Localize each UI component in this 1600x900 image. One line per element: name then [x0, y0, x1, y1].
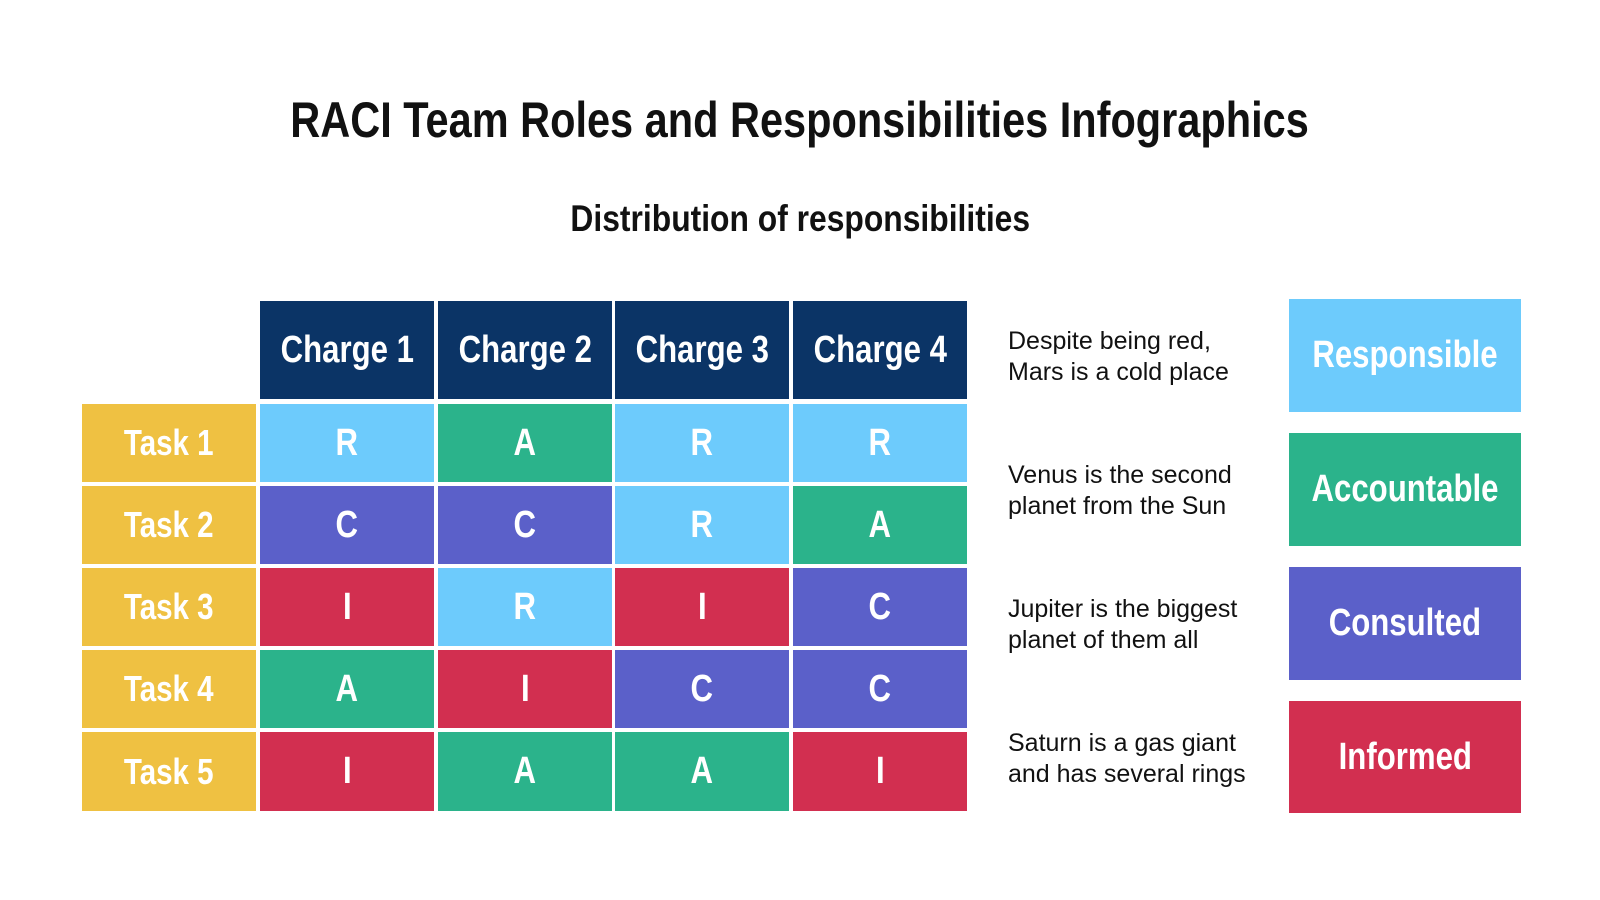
legend box: consulted	[1289, 567, 1521, 680]
legend text: responsible: Despite being red,	[1008, 327, 1211, 355]
task rows: Task 1	[124, 422, 214, 463]
task rows: C	[869, 668, 891, 710]
task rows: R	[691, 504, 713, 546]
legend box: consulted: Consulted	[1329, 602, 1481, 644]
legend text: accountable	[1008, 461, 1232, 520]
task rows: I	[698, 586, 706, 628]
header row: Charge 3	[635, 328, 769, 370]
task rows: Task 3	[124, 586, 214, 627]
table	[82, 301, 967, 811]
legend text: informed	[1008, 729, 1246, 788]
header row: Charge 1	[280, 328, 414, 370]
legend box: informed: Informed	[1338, 736, 1472, 778]
legend box: accountable	[1289, 433, 1521, 546]
task rows: Task 5	[124, 750, 214, 792]
task rows: A	[514, 422, 536, 464]
task rows: C	[869, 586, 891, 628]
header row: Charge 2	[458, 328, 592, 370]
legend text: consulted: planet of them all	[1008, 626, 1198, 654]
legend box: accountable: Accountable	[1311, 468, 1498, 510]
task rows: I	[876, 750, 884, 792]
header row	[260, 301, 967, 399]
legend box: responsible	[1289, 299, 1521, 412]
task rows: R	[869, 422, 891, 464]
legend text: informed: Saturn is a gas giant	[1008, 729, 1236, 757]
subtitle: Distribution of responsibilities	[570, 198, 1030, 239]
task rows: A	[336, 668, 358, 710]
task rows: C	[336, 504, 358, 546]
legend box: responsible: Responsible	[1312, 334, 1498, 376]
task rows: R	[336, 422, 358, 464]
task rows: C	[691, 668, 713, 710]
legend text: accountable: planet from the Sun	[1008, 492, 1226, 520]
task rows: C	[514, 504, 536, 546]
task rows: I	[521, 668, 529, 710]
task rows: Task 4	[124, 668, 214, 709]
task rows: A	[514, 750, 536, 792]
legend box: informed	[1289, 701, 1521, 813]
legend text: accountable: Venus is the second	[1008, 461, 1232, 489]
task rows: R	[514, 586, 536, 628]
task rows: I	[343, 586, 351, 628]
task rows	[82, 404, 967, 811]
title: RACI Team Roles and Responsibilities Infographics	[291, 92, 1309, 148]
task rows: A	[869, 504, 891, 546]
legend text: responsible	[1008, 327, 1229, 386]
task rows: I	[343, 750, 351, 792]
header row: Charge 4	[813, 328, 947, 370]
task rows: A	[691, 750, 713, 792]
task rows: Task 2	[124, 504, 214, 545]
legend text: informed: and has several rings	[1008, 760, 1246, 788]
legend text: consulted: Jupiter is the biggest	[1008, 595, 1237, 623]
legend text: consulted	[1008, 595, 1238, 654]
task rows: R	[691, 422, 713, 464]
legend text: responsible: Mars is a cold place	[1008, 358, 1229, 386]
